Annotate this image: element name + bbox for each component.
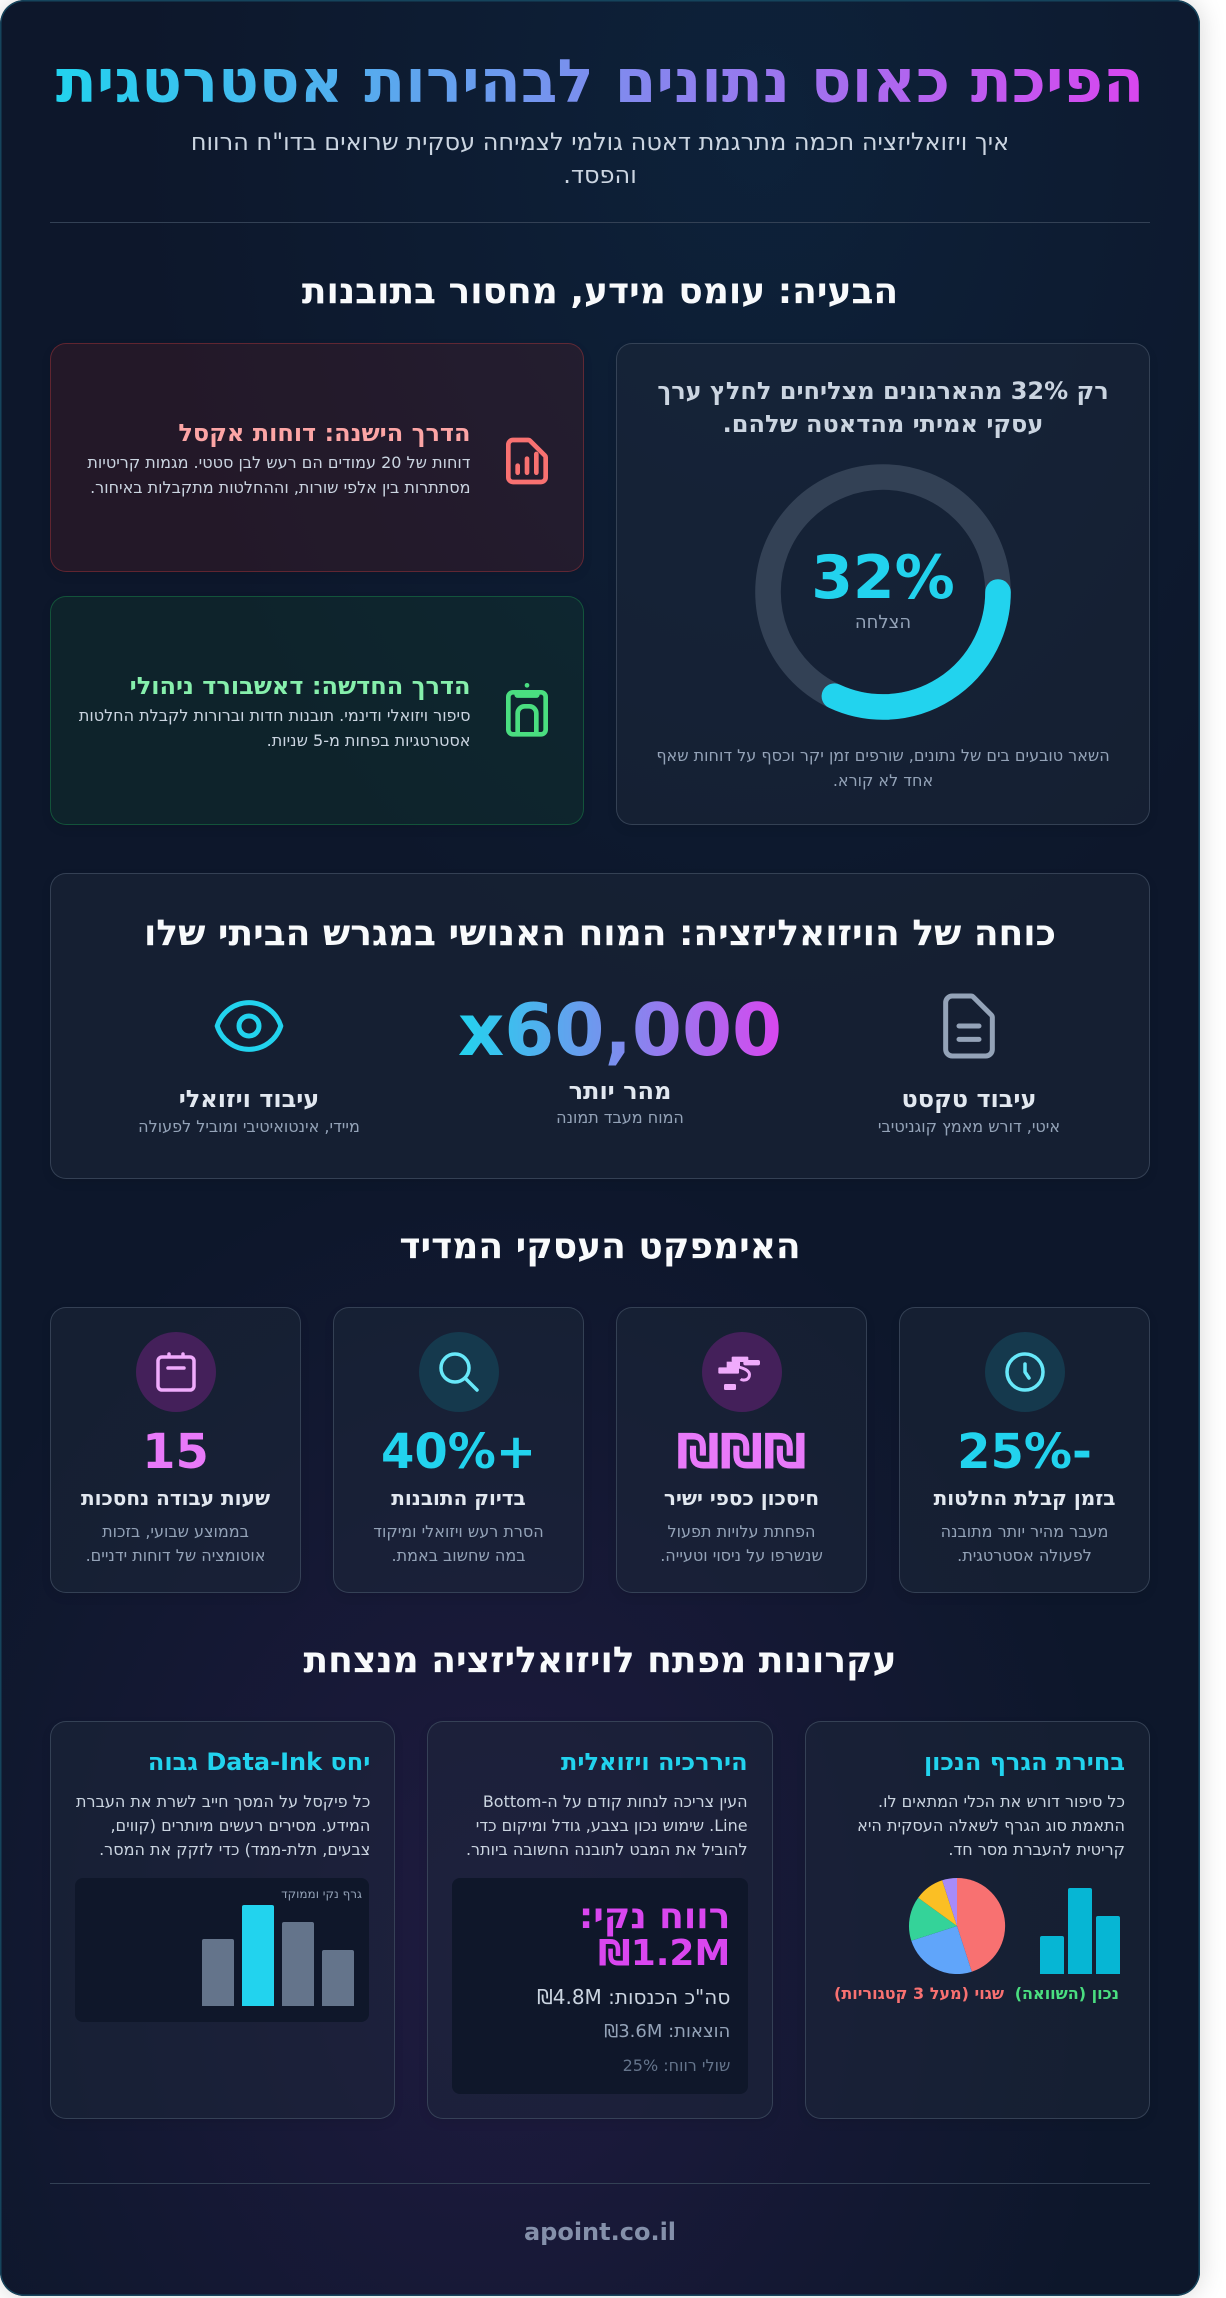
stat description: לפעולה אסטרטגית. <box>957 1546 1092 1565</box>
icon: magnifier <box>418 1332 498 1412</box>
stat description <box>373 1522 544 1565</box>
stat description: מעבר מהיר יותר מתובנה <box>941 1522 1108 1541</box>
panel: old way <box>50 343 584 572</box>
card: visual hierarchy <box>427 1721 773 2119</box>
new way text: אסטרטגיות בפחות מ-5 שניות. <box>267 731 470 750</box>
wrong chart: pie <box>908 1878 1006 1974</box>
stat description: בממוצע שבועי, בזכות <box>102 1522 249 1541</box>
title: הפיכת כאוס נתונים לבהירות אסטרטגית <box>56 46 1144 116</box>
donut heading: עסקי אמיתי מהדאטה שלהם. <box>723 410 1043 438</box>
donut label: הצלחה <box>855 612 911 633</box>
panel: 32 percent donut <box>616 343 1150 825</box>
card text: Line. שימוש נכון בצבע, גודל ומיקום כדי <box>476 1816 748 1835</box>
donut heading: רק 32% מהארגונים מצליחים לחלץ ערך <box>657 377 1109 405</box>
old way text: דוחות של 20 עמודים הם רעש לבן סטטי. מגמות קריטיות <box>87 453 470 472</box>
stat value: ₪₪₪ <box>676 1424 807 1480</box>
donut note: השאר טובעים בים של נתונים, שורפים זמן יקר וכסף על דוחות שאף <box>656 746 1110 765</box>
net profit headline: רווח נקי: <box>579 1896 730 1937</box>
card text: צבעים, תלת-ממד) כדי לזקק את המסר. <box>99 1840 370 1859</box>
card text: כל פיקסל על המסך חייב לשרת את העברת <box>76 1792 370 1811</box>
stat card: insight accuracy <box>333 1307 584 1593</box>
stat card: hours saved <box>50 1307 301 1593</box>
correct chart label: נכון (השוואה) <box>1015 1984 1119 2003</box>
donut note <box>656 746 1110 790</box>
old way text <box>87 453 470 497</box>
card text: העין צריכה לנחות קודם על ה-Bottom <box>483 1792 748 1811</box>
donut value: 32% <box>811 543 955 613</box>
card text <box>76 1792 370 1859</box>
stat label: בזמן קבלת החלטות <box>934 1486 1115 1510</box>
subtitle <box>191 128 1009 189</box>
icon: clock <box>984 1332 1064 1412</box>
stat value: +40% <box>381 1424 536 1480</box>
icon: calendar <box>136 1332 216 1412</box>
text processing column <box>878 994 1060 1136</box>
panel heading: כוחה של הויזואליזציה: המוח האנושי במגרש הביתי שלו <box>144 913 1056 954</box>
subtitle: איך ויזואליזציה חכמה מתרגמת דאטה גולמי לצמיחה עסקית שרואים בדו"ח הרווח <box>191 128 1009 156</box>
visual processing label: עיבוד ויזואלי <box>179 1085 319 1113</box>
stat label: בדיוק התובנות <box>391 1486 526 1510</box>
donut heading <box>657 377 1109 438</box>
card: data-ink ratio <box>50 1721 395 2119</box>
card text: התאמת סוג הגרף לשאלה העסקית היא <box>857 1816 1125 1835</box>
net profit headline <box>579 1896 730 1974</box>
speed note: המוח מעבד תמונה <box>556 1108 684 1127</box>
footer website: apoint.co.il <box>524 2218 676 2246</box>
stat description: הסרת רעש ויזואלי ומיקוד <box>373 1522 544 1541</box>
icon: text document <box>943 994 995 1058</box>
card heading: היררכיה ויזואלית <box>561 1748 748 1776</box>
text processing note: איטי, דורש מאמץ קוגניטיבי <box>878 1117 1060 1136</box>
speed number: x60,000 <box>458 988 782 1072</box>
donut chart <box>755 464 1011 720</box>
new way text: סיפור ויזואלי ודינמי. תובנות חדות וברורות לקבלת החלטות <box>79 706 470 725</box>
60000x stat column <box>458 988 782 1127</box>
total revenue: סה"כ הכנסות: ₪4.8M <box>537 1985 730 2009</box>
stat description <box>941 1522 1108 1565</box>
old way heading: הדרך הישנה: דוחות אקסל <box>178 419 470 447</box>
profit margin: שולי רווח: 25% <box>623 2056 730 2075</box>
card text <box>857 1792 1125 1859</box>
stat label: שעות עבודה נחסכות <box>81 1486 270 1510</box>
speed label: מהר יותר <box>569 1077 671 1105</box>
card heading: יחס Data-Ink גבוה <box>148 1748 370 1776</box>
clean bar chart example <box>75 1878 369 2022</box>
card text: המידע. מסירים רעשים מיותרים (קווים, <box>110 1816 370 1835</box>
donut note: אחד לא קורא. <box>833 771 933 790</box>
heading: key principles: עקרונות מפתח לויזואליזציה מנצחת <box>304 1640 896 1681</box>
chart caption: גרף נקי וממוקד <box>281 1887 362 1901</box>
visual processing note: מיידי, אינטואיטיבי ומוביל לפעולה <box>138 1117 360 1136</box>
heading: business impact: האימפקט העסקי המדיד <box>399 1226 801 1267</box>
card heading: בחירת הגרף הנכון <box>924 1748 1125 1776</box>
stat description: שנשרפו על ניסוי וטעייה. <box>660 1546 823 1565</box>
bars <box>202 1905 354 2006</box>
wrong chart label: שגוי (מעל 3 קטגוריות) <box>834 1984 1004 2003</box>
stat description <box>660 1522 823 1565</box>
visual processing column <box>138 1000 360 1136</box>
text processing label: עיבוד טקסט <box>902 1085 1036 1113</box>
stat card: decision time <box>899 1307 1150 1593</box>
heading: the problem: הבעיה: עומס מידע, מחסור בתובנות <box>302 271 898 312</box>
stat description <box>86 1522 265 1565</box>
stat description: במה שחשוב באמת. <box>392 1546 525 1565</box>
card: choosing the right chart <box>805 1721 1150 2119</box>
stat card: direct savings <box>616 1307 867 1593</box>
net profit headline: ₪1.2M <box>598 1933 730 1974</box>
card text: קריטית להעברת מסר חד. <box>948 1840 1125 1859</box>
stat value: -25% <box>957 1424 1092 1480</box>
icon: dashboard device <box>506 683 548 737</box>
icon: eye <box>214 1000 284 1052</box>
panel: power of visualization <box>50 873 1150 1179</box>
old way text: מסתתרות בין אלפי שורות, וההחלטות מתקבלות באיחור. <box>90 478 470 497</box>
stat description: אוטומציה של דוחות ידניים. <box>86 1546 265 1565</box>
stat value: 15 <box>142 1424 209 1480</box>
expenses: הוצאות: ₪3.6M <box>604 2021 730 2042</box>
financial summary example <box>452 1878 748 2094</box>
icon: report document <box>506 438 548 484</box>
stat description: הפחתת עלויות תפעול <box>668 1522 816 1541</box>
correct chart: bars <box>1040 1888 1120 1974</box>
card text: כל סיפור דורש את הכלי המתאים לו. <box>878 1792 1125 1811</box>
card text <box>466 1792 748 1859</box>
subtitle: והפסד. <box>563 161 637 189</box>
icon: money glyph <box>702 1332 782 1412</box>
panel: new way <box>50 596 584 825</box>
new way heading: הדרך החדשה: דאשבורד ניהולי <box>130 672 470 700</box>
stat label: חיסכון כספי ישיר <box>664 1486 819 1510</box>
card text: להוביל את המבט לתובנה החשובה ביותר. <box>466 1840 748 1859</box>
new way text <box>79 706 470 750</box>
